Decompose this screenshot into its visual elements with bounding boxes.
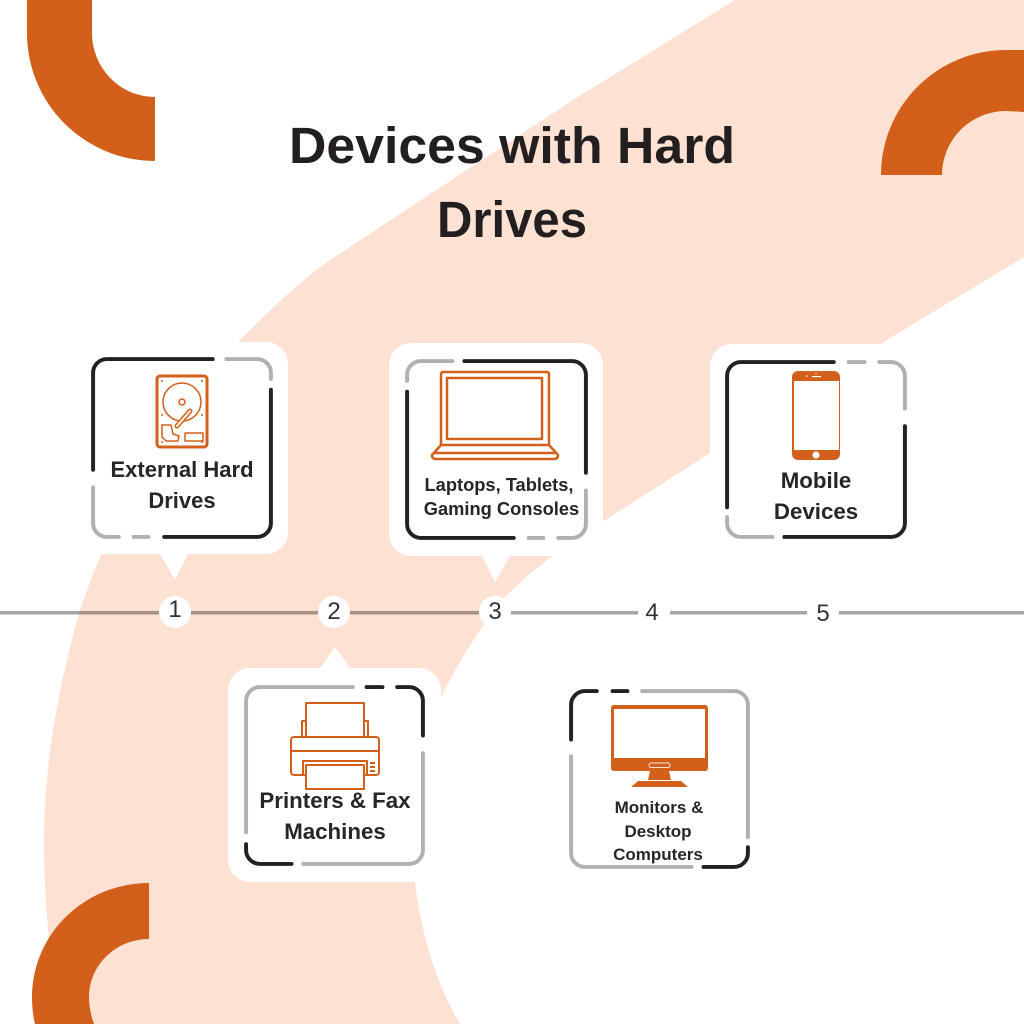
title: Drives <box>437 191 587 248</box>
timeline axis <box>0 611 1024 614</box>
label: Computers <box>613 845 703 864</box>
timeline marker 4: 4 <box>645 599 659 626</box>
callout shape <box>76 342 288 580</box>
dashed frame <box>727 362 905 537</box>
label: Gaming Consoles <box>424 498 579 519</box>
timeline marker 3: 3 <box>488 598 502 625</box>
title <box>289 117 735 248</box>
timeline marker 1: 1 <box>168 596 182 623</box>
label: Drives <box>148 488 216 513</box>
panel: laptops, tablets, gaming consoles <box>389 343 603 582</box>
panel: printers and fax machines <box>228 647 441 882</box>
callout shape <box>228 647 441 882</box>
label: External Hard <box>110 457 254 482</box>
card background <box>553 673 766 885</box>
icon: laptop <box>432 372 558 459</box>
title: Devices with Hard <box>289 117 735 174</box>
timeline marker 5: 5 <box>816 600 830 627</box>
timeline marker 3 <box>479 596 511 628</box>
card background <box>710 344 922 556</box>
dashed frame <box>571 691 748 867</box>
dashed frame <box>246 687 423 864</box>
timeline marker 2: 2 <box>327 598 341 625</box>
timeline marker 2 <box>318 596 350 628</box>
timeline marker 4 <box>638 596 670 628</box>
timeline marker 5 <box>807 596 839 628</box>
label: Monitors & <box>615 798 703 817</box>
decorative arc: top right <box>881 50 1024 175</box>
panel: mobile devices <box>710 344 922 556</box>
icon: hard drive <box>157 376 207 447</box>
panel: external hard drives <box>76 342 288 580</box>
decorative arc: top left <box>27 0 155 161</box>
decorative arc: bottom left <box>32 883 149 1024</box>
label: Desktop <box>624 822 692 841</box>
dashed frame <box>93 359 271 537</box>
callout shape <box>389 343 603 582</box>
panel: monitors and desktop computers <box>553 673 766 885</box>
icon: smartphone <box>792 371 840 460</box>
icon: printer <box>291 703 379 789</box>
label: Devices <box>774 499 858 524</box>
label: Laptops, Tablets, <box>425 474 573 495</box>
icon: monitor <box>611 705 708 787</box>
timeline marker 1 <box>159 596 191 628</box>
label: Machines <box>284 819 386 844</box>
dashed frame <box>407 361 586 538</box>
label: Mobile <box>781 468 851 493</box>
label: Printers & Fax <box>259 788 411 813</box>
